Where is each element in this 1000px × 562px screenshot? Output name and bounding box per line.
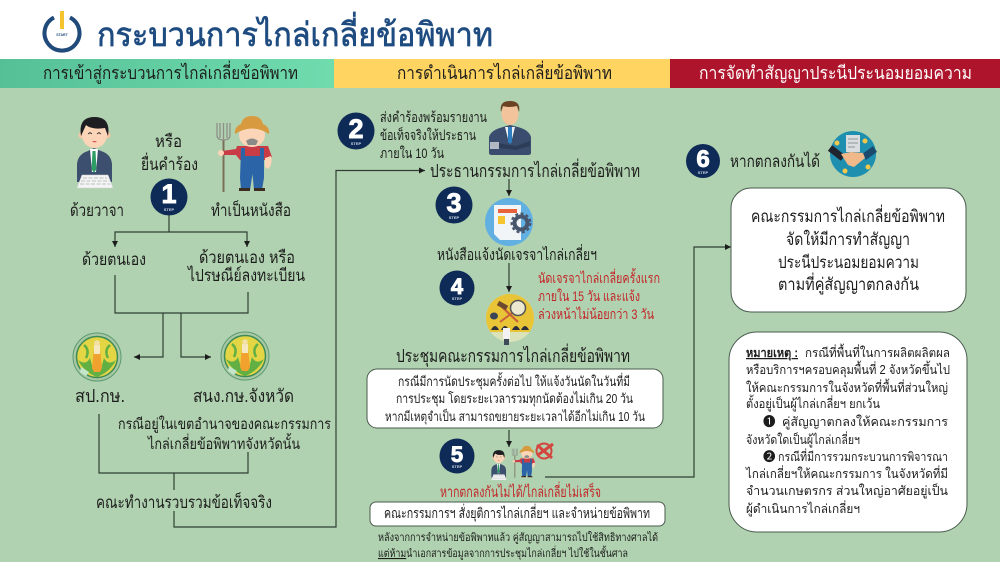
panel: remark: กรณีที่พื้นที่ในการผลิตผลิตผล xyxy=(805,343,950,360)
icon: central seal xyxy=(73,333,121,381)
heading: mediation committee meeting: ประชุมคณะกรรมการไกล่เกลี่ยข้อพิพาท xyxy=(396,343,630,367)
text: first mediation deadline xyxy=(538,268,660,322)
label: notice of mediation date: หนังสือแจ้งนัดเจรจาไกล่เกลี่ยฯ xyxy=(437,244,597,264)
step 2 badge: 2 xyxy=(348,114,364,144)
panel: remark: จังหวัดใดเป็นผู้ไกล่เกลี่ยฯ xyxy=(746,431,860,448)
panel: remark: หมายเหตุ : xyxy=(746,346,798,361)
step 5 badge xyxy=(440,438,474,474)
panel: remark: คู่สัญญาตกลงให้คณะกรรมการ xyxy=(782,415,948,430)
arrow to in person xyxy=(115,215,169,247)
section header: conducting mediation xyxy=(334,59,670,88)
panel: compromise agreement xyxy=(731,188,966,312)
step 3 badge: STEP xyxy=(449,215,460,220)
connector to offices xyxy=(115,275,248,313)
text: send request within 10 days xyxy=(380,109,487,161)
panel: remark: ตั้งอยู่เป็นผู้ไกล่เกลี่ยฯ ยกเว้น xyxy=(746,394,880,412)
panel: next meeting rule xyxy=(367,369,663,428)
step 1 badge: 1 xyxy=(161,179,177,209)
label: provincial office: สนง.กษ.จังหวัด xyxy=(193,386,294,406)
label: in person or registered mail xyxy=(186,248,305,285)
panel: committee ends mediation: คณะกรรมการฯ สั่งยุติการไกล่เกลี่ยฯ และจำหน่ายข้อพิพาท xyxy=(384,504,650,522)
step 1 badge xyxy=(150,178,188,216)
arrow to step 5 xyxy=(508,430,510,447)
panel: next meeting rule: กรณีมีการนัดประชุมครั้งต่อไป ให้แจ้งวันนัดในวันที่มี xyxy=(398,372,630,390)
label: in person: ด้วยตนเอง xyxy=(82,250,146,269)
arrow to chairman xyxy=(174,170,425,527)
panel: compromise agreement: ประนีประนอมยอมความ xyxy=(778,253,919,272)
panel: compromise agreement: คณะกรรมการไกล่เกลี่ยข้อพิพาท xyxy=(751,204,945,226)
arrow to provincial office xyxy=(181,313,211,357)
text: send request within 10 days: ส่งคำร้องพร้อมรายงาน xyxy=(380,109,487,125)
text: working group gathers facts: คณะทำงานรวบรวมข้อเท็จจริง xyxy=(96,491,272,512)
arrow to central office xyxy=(134,313,163,357)
text: after dismissal note xyxy=(378,531,658,560)
step 6 badge: 6 xyxy=(696,146,710,173)
text: mediation failed: หากตกลงกันไม่ได้/ไกล่เกลี่ยไม่เสร็จ xyxy=(440,481,601,501)
panel: remark xyxy=(729,332,967,532)
step 4 badge: STEP xyxy=(452,296,463,301)
step 4 badge xyxy=(440,270,474,306)
panel: remark: ผู้ดำเนินการไกล่เกลี่ยฯ xyxy=(746,500,860,517)
text: or submit request: หรือ xyxy=(155,132,182,151)
step 1 badge: STEP xyxy=(164,207,175,212)
text: or submit request: ยื่นคำร้อง xyxy=(141,152,198,174)
panel: remark: กรณีที่มีการรวมกระบวนการพิจารณา xyxy=(778,448,948,464)
label: in person or registered mail: ไปรษณีย์ลงทะเบียน xyxy=(186,265,305,285)
label: in person or registered mail: ด้วยตนเอง หรือ xyxy=(199,248,295,267)
section header: compromise agreement xyxy=(670,59,1000,88)
panel: compromise agreement: จัดให้มีการทำสัญญา xyxy=(786,229,910,249)
text: after dismissal note: แต่ห้ามนำเอกสารข้อมูลจากการประชุมไกล่เกลี่ยฯ ไปใช้ในชั้นศาล xyxy=(378,545,628,560)
step 4 badge: 4 xyxy=(451,274,464,299)
step 2 badge: STEP xyxy=(351,141,362,146)
icon: officer with paper xyxy=(77,117,113,188)
step 3 badge: 3 xyxy=(446,188,462,218)
arrow to in person or mail xyxy=(169,232,247,247)
text: after dismissal note: หลังจากการจำหน่ายข้อพิพาทแล้ว คู่สัญญาสามารถไปใช้สิทธิทางศาลได้ xyxy=(378,531,658,544)
text: jurisdiction note: ไกล่เกลี่ยข้อพิพาทจังหวัดนั้น xyxy=(147,433,300,453)
icon: farmer with pitchfork xyxy=(217,116,272,192)
icon: chairman xyxy=(489,101,531,155)
label: verbally: ด้วยวาจา xyxy=(70,201,124,220)
step 2 badge xyxy=(338,112,374,150)
icon: mediation meeting xyxy=(486,294,534,345)
section header: entering mediation xyxy=(0,59,334,88)
text: or submit request xyxy=(141,132,198,174)
icon: notice document with gear xyxy=(485,198,533,246)
label: in writing: ทำเป็นหนังสือ xyxy=(211,199,291,220)
connector to working group xyxy=(99,414,248,490)
icon: start power button: START xyxy=(56,33,69,37)
text: send request within 10 days: ภายใน 10 วัน xyxy=(380,145,444,161)
step 5 badge: STEP xyxy=(452,464,463,469)
panel: remark: ❶ xyxy=(763,415,776,429)
panel: next meeting rule: หากมีเหตุจำเป็น สามารถขยายระยะเวลาได้อีกไม่เกิน 10 วัน xyxy=(385,407,645,425)
label: mediation committee chairman: ประธานกรรมการไกล่เกลี่ยข้อพิพาท xyxy=(430,158,640,181)
text: first mediation deadline: ภายใน 15 วัน และแจ้ง xyxy=(538,288,640,304)
connector to step 6 panel xyxy=(545,247,731,477)
panel: remark: ไกล่เกลี่ยฯให้คณะกรรมการ ในจังหวัดที่มี xyxy=(745,465,948,481)
panel: committee ends mediation xyxy=(370,502,665,526)
label: central office: สป.กษ. xyxy=(75,386,125,406)
step 3 badge xyxy=(436,186,472,224)
panel: remark: ❷ xyxy=(763,450,776,464)
panel: remark: หรือบริการฯครอบคลุมพื้นที่ 2 จังหวัดขึ้นไป xyxy=(746,360,950,378)
icon: handshake agreement xyxy=(830,131,876,177)
section header: entering mediation: การเข้าสู่กระบวนการไกล่เกลี่ยข้อพิพาท xyxy=(43,60,298,84)
step 6 badge: STEP xyxy=(698,170,709,175)
icon: provincial seal xyxy=(221,332,269,380)
text: jurisdiction note: กรณีอยู่ในเขตอำนาจของคณะกรรมการ xyxy=(118,415,331,433)
text: send request within 10 days: ข้อเท็จจริงให้ประธาน xyxy=(380,126,476,143)
text: jurisdiction note xyxy=(118,415,331,453)
arrow to step 3 xyxy=(508,179,510,196)
label: if agreed: หากตกลงกันได้ xyxy=(730,151,820,171)
icon: parties disagree xyxy=(491,444,553,480)
panel: remark: จำนวนเกษตรกร ส่วนใหญ่อาศัยอยู่เป็น xyxy=(746,483,948,499)
panel: remark: ให้คณะกรรมการในจังหวัดที่พื้นที่ส่วนใหญ่ xyxy=(746,378,948,395)
step 5 badge: 5 xyxy=(451,442,463,467)
step 6 badge xyxy=(686,144,720,178)
section header: conducting mediation: การดำเนินการไกล่เกลี่ยข้อพิพาท xyxy=(397,60,612,83)
text: first mediation deadline: นัดเจรจาไกล่เกลี่ยครั้งแรก xyxy=(538,268,660,286)
panel: next meeting rule: การประชุม โดยระยะเวลารวมทุกนัดต้องไม่เกิน 20 วัน xyxy=(396,391,633,407)
text: first mediation deadline: ล่วงหน้าไม่น้อยกว่า 3 วัน xyxy=(538,306,654,322)
arrow to step 4 xyxy=(508,263,510,292)
icon: start power button xyxy=(44,11,80,51)
title: กระบวนการไกล่เกลี่ยข้อพิพาท xyxy=(97,12,493,53)
panel: compromise agreement: ตามที่คู่สัญญาตกลงกัน xyxy=(778,272,919,295)
